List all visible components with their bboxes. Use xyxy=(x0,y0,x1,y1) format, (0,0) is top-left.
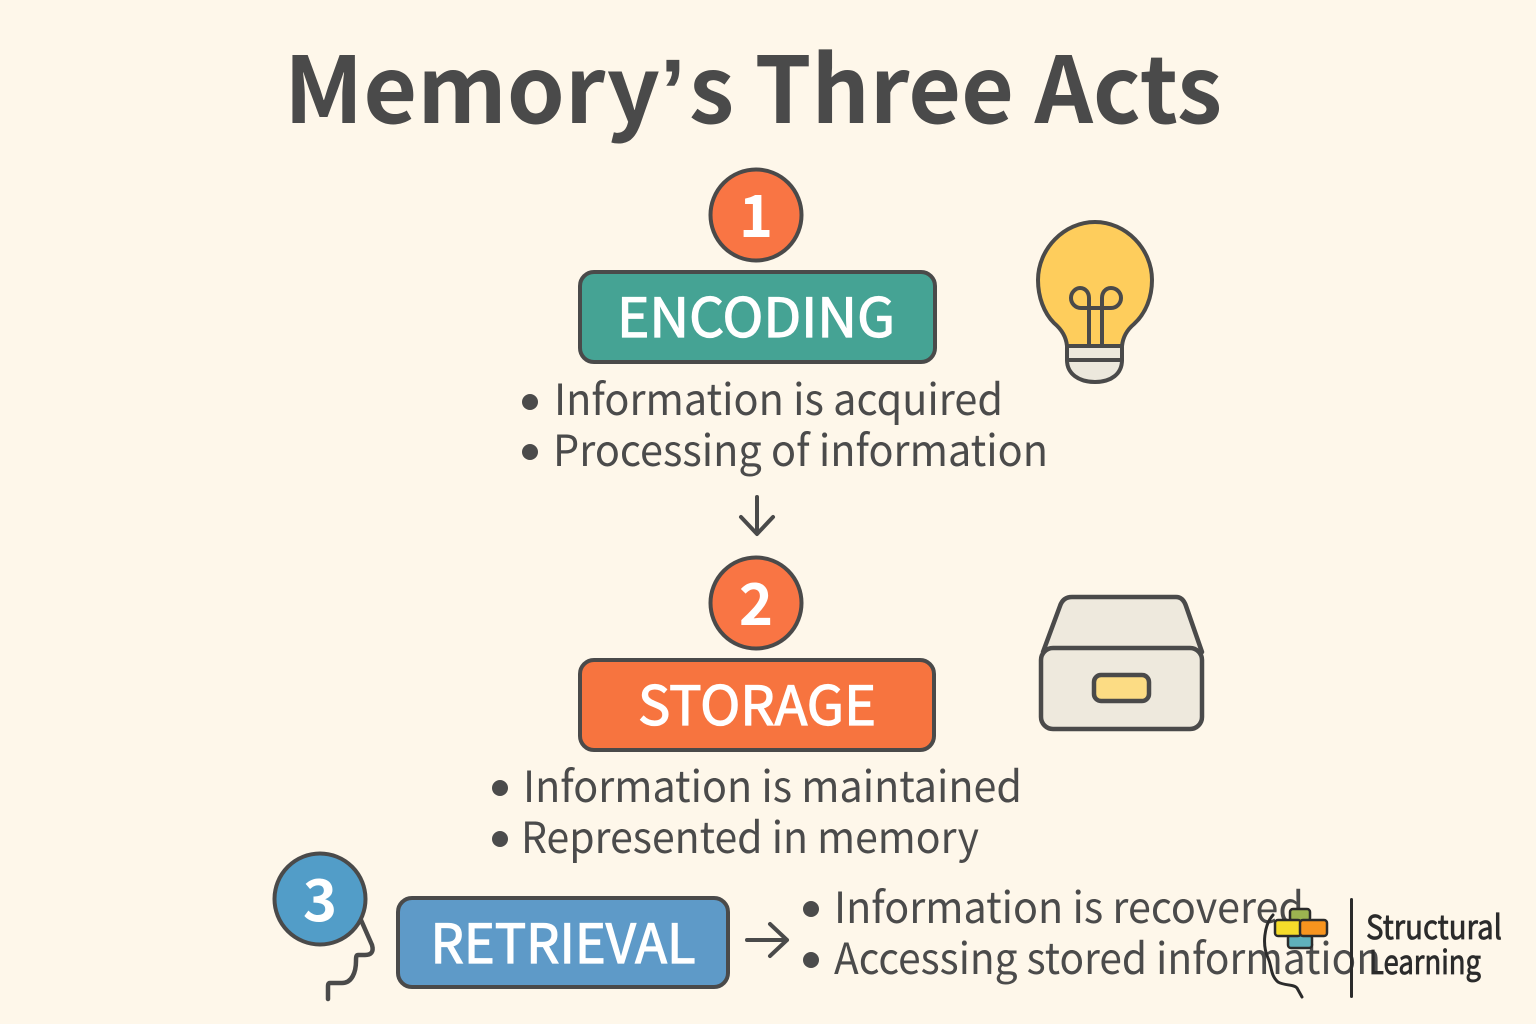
logo wordmark xyxy=(1366,901,1502,984)
logo icon: coloured blocks and head xyxy=(1265,909,1327,997)
encoding bullets: Processing of information xyxy=(553,417,1048,479)
retrieval bullets: Accessing stored information xyxy=(834,925,1381,987)
storage bullets: Represented in memory xyxy=(521,804,979,866)
panel: encoding step xyxy=(522,170,1048,479)
logo wordmark: Structural xyxy=(1366,901,1502,949)
storage heading xyxy=(580,660,934,750)
panel: retrieval step xyxy=(274,854,1381,999)
title: Memory xyxy=(284,17,660,150)
retrieval heading: RETRIEVAL xyxy=(430,900,696,979)
number badge 2 xyxy=(710,558,802,648)
title: ’ xyxy=(660,41,686,143)
logo: Structural Learning xyxy=(1265,898,1502,998)
icon: storage drawer xyxy=(1041,597,1202,729)
number badge 3: 3 xyxy=(303,854,337,938)
encoding heading: ENCODING xyxy=(617,274,895,353)
title: s Three Acts xyxy=(689,17,1222,150)
number badge 3 xyxy=(274,854,366,944)
retrieval bullets xyxy=(803,874,1381,987)
icon: head outline xyxy=(328,920,373,999)
storage bullets xyxy=(492,753,1022,866)
number badge 1 xyxy=(710,170,802,260)
storage bullets: Information is maintained xyxy=(523,753,1022,815)
panel: storage step xyxy=(492,558,1022,866)
number badge 1: 1 xyxy=(739,170,773,254)
storage heading: STORAGE xyxy=(638,662,876,741)
logo wordmark: Learning xyxy=(1369,936,1481,984)
arrow: encoding to storage xyxy=(741,497,773,534)
encoding heading xyxy=(580,272,935,362)
title xyxy=(284,17,1222,150)
encoding bullets xyxy=(522,366,1048,479)
retrieval bullets: Information is recovered xyxy=(834,874,1304,936)
icon: light bulb xyxy=(1038,222,1152,382)
logo divider xyxy=(1350,898,1353,998)
number badge 2: 2 xyxy=(739,558,773,642)
arrow: retrieval to bullets xyxy=(747,924,787,956)
encoding bullets: Information is acquired xyxy=(554,366,1003,428)
